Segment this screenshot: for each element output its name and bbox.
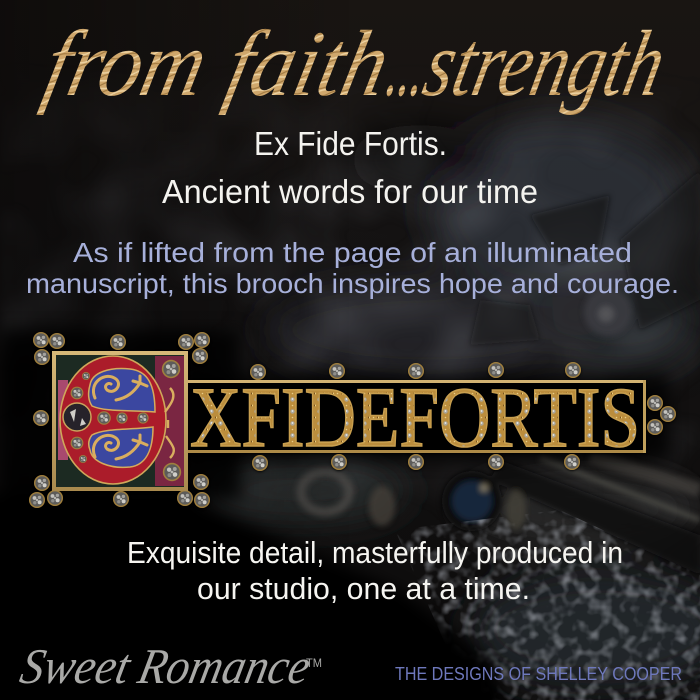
description text: manuscript, this brooch inspires hope and courage. [26, 268, 679, 299]
subtitle: Latin motto and translation: Ex Fide Fortis. [254, 125, 447, 162]
title: ... [379, 11, 439, 116]
subtitle: Latin motto and translation [162, 125, 538, 210]
title: faith [217, 11, 399, 116]
subtitle: Latin motto and translation: Ancient words for our time [162, 173, 538, 210]
blue lobes [89, 369, 155, 412]
description text [26, 237, 679, 299]
corner gems [29, 332, 210, 508]
brand logo: Sweet Romance: Sweet [16, 638, 137, 694]
title [35, 11, 675, 116]
brand logo: Sweet Romance: TM [306, 656, 322, 670]
brooch: Ex Fide Fortis illuminated bar [29, 332, 676, 508]
illuminated plaque [52, 351, 188, 491]
title: from [35, 11, 217, 116]
description text: As if lifted from the page of an illuminated [73, 237, 632, 268]
bar gems [250, 362, 676, 471]
closing statement: our studio, one at a time. [197, 571, 530, 606]
closing statement: Exquisite detail, masterfully produced in [127, 535, 623, 570]
brand logo: Sweet Romance [16, 638, 322, 694]
closing statement [127, 535, 623, 606]
brand logo: Sweet Romance: Romance [133, 638, 315, 694]
